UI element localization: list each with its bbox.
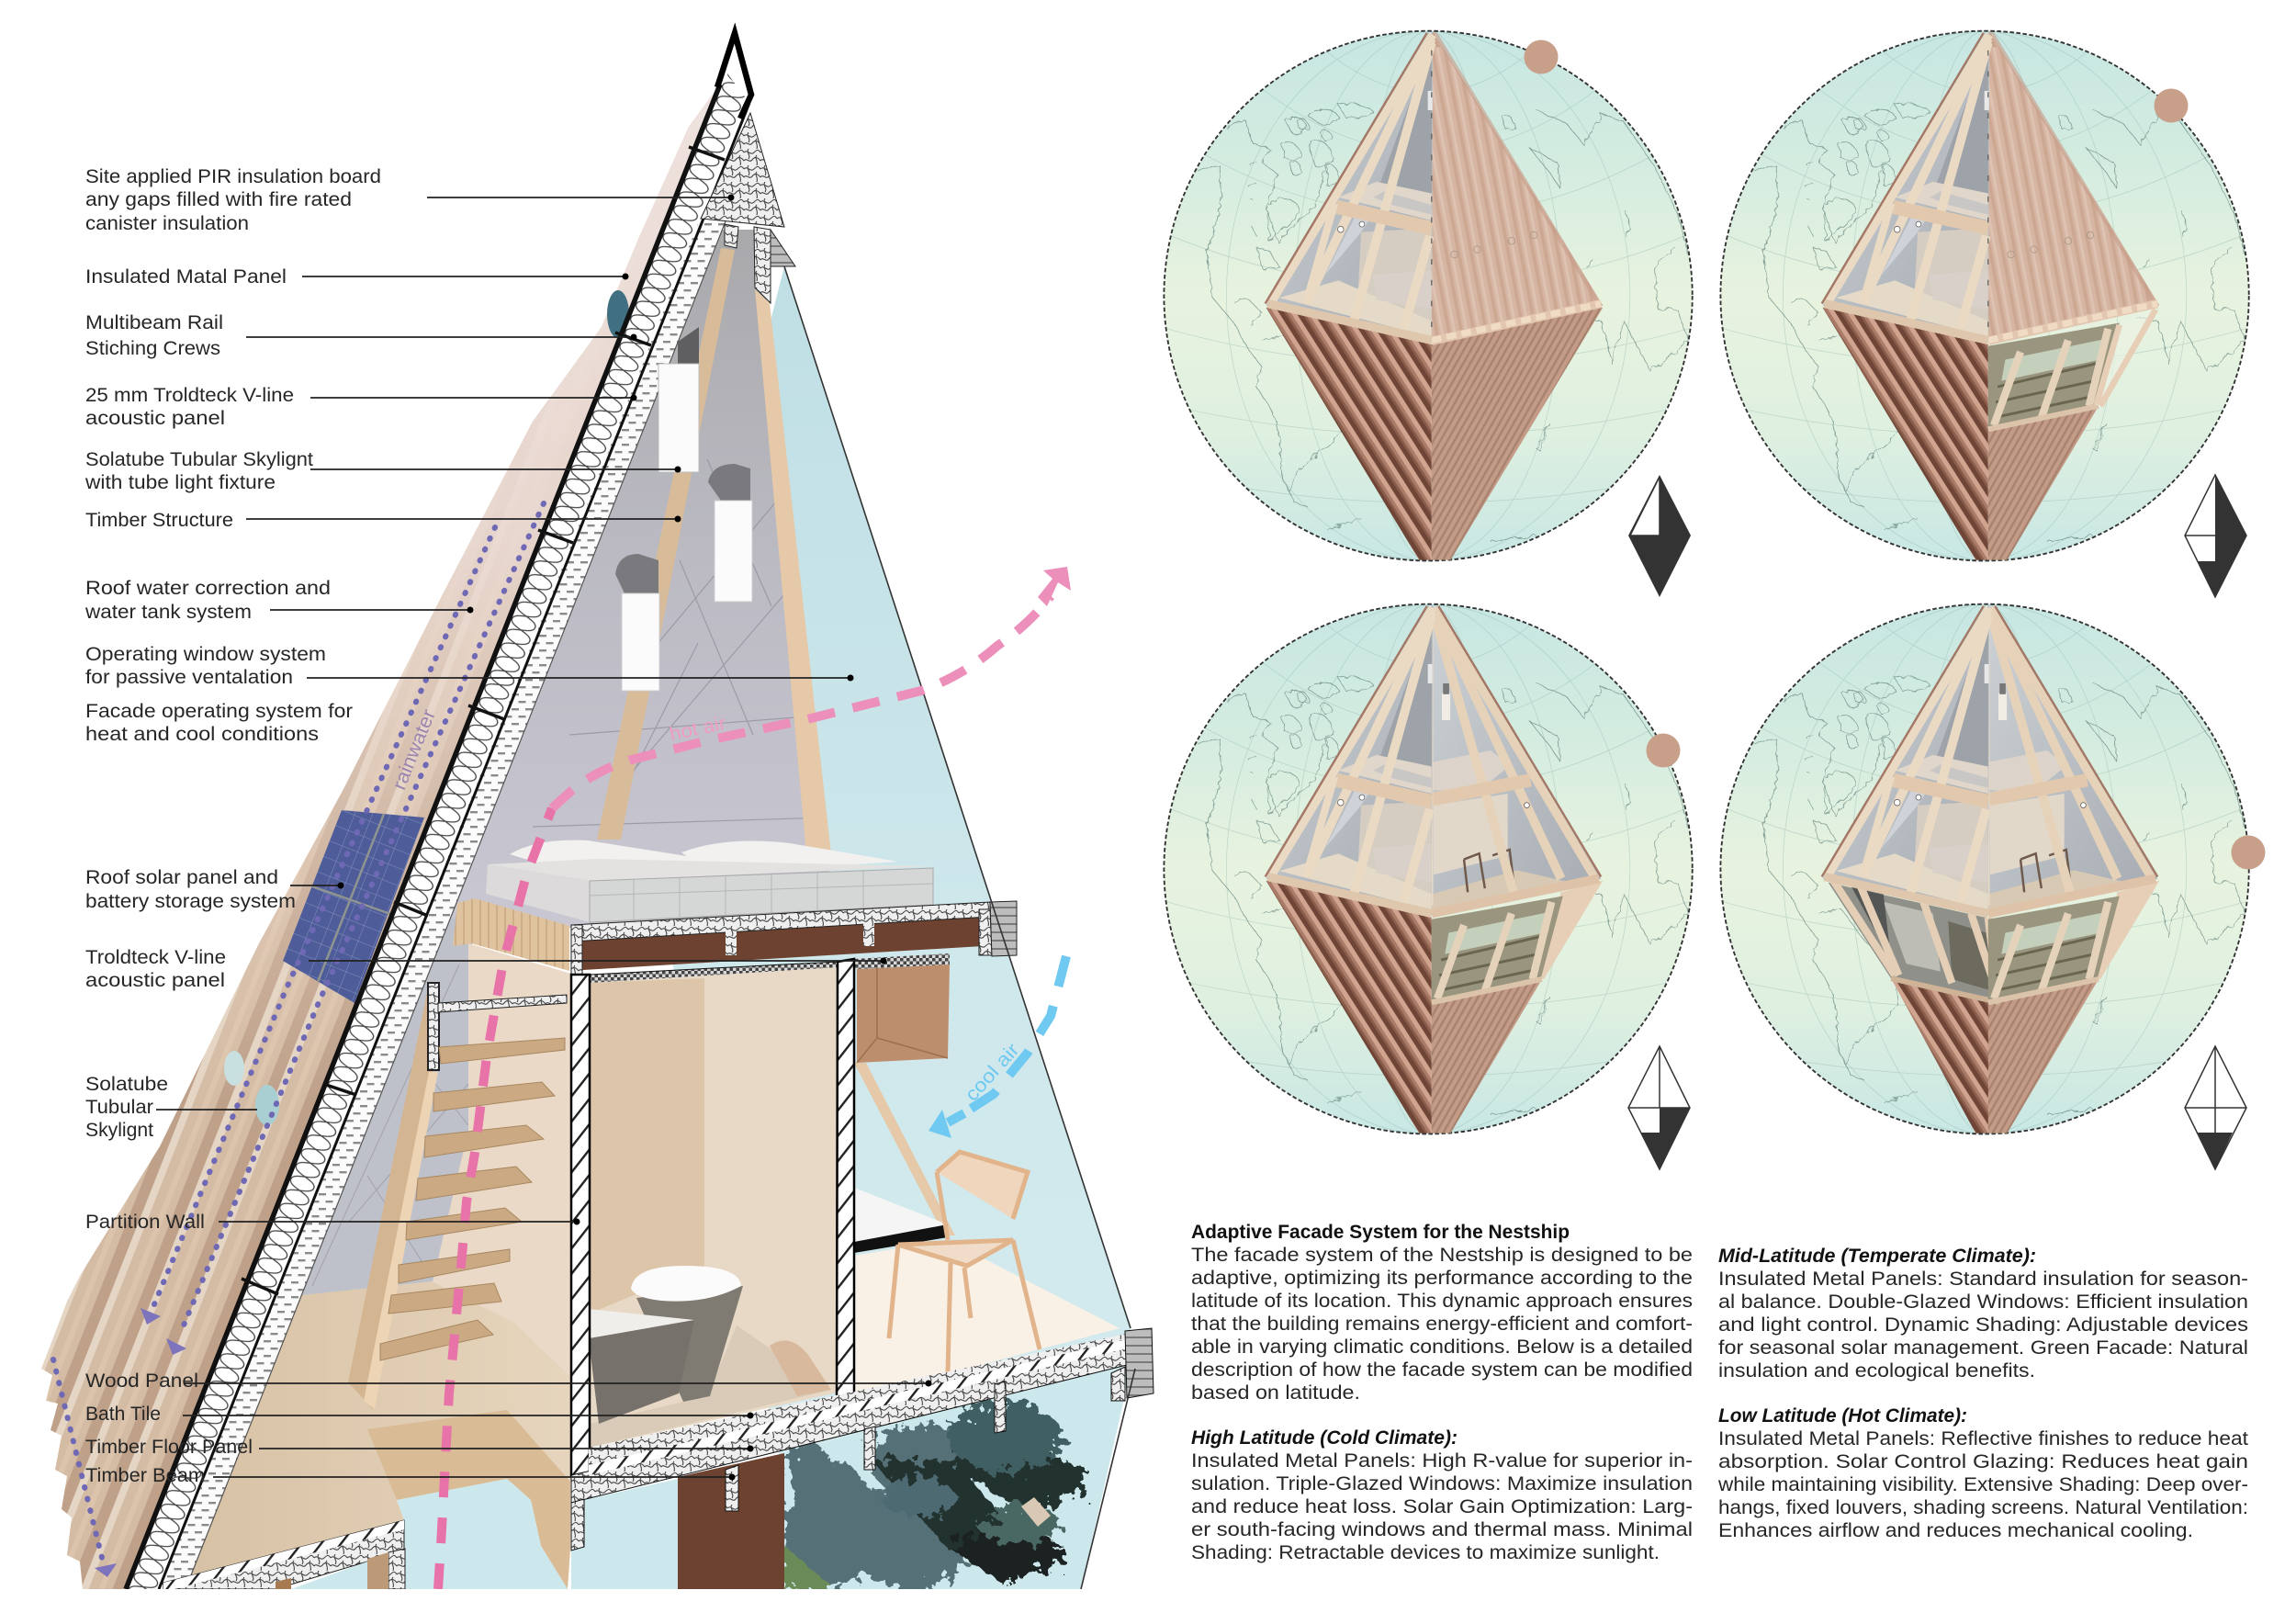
label: solar panel: battery storage system [85, 891, 296, 912]
rainwater dotted flow with arrows [53, 503, 544, 1577]
planting [781, 1350, 1135, 1589]
timber post right [755, 289, 831, 854]
toilet [589, 1266, 743, 1424]
text block: high latitude [1191, 1427, 1693, 1563]
label: roof water: water tank system [84, 602, 252, 623]
intro paragraph: The facade system of the Nestship is designed to be [1191, 1245, 1693, 1266]
rainwater label: rainwater [388, 706, 440, 793]
diagonal timber [854, 1063, 955, 1235]
section drawing: A-frame cross section [41, 33, 1154, 1589]
text block: low latitude: absorption. Solar Control Glazing: Reduces heat gain [1718, 1451, 2248, 1472]
label: PIR insulation: any gaps filled with fire rated [85, 189, 352, 210]
label: solar panel [85, 867, 343, 912]
text block: high latitude: er south-facing windows and thermal mass. Minimal [1191, 1519, 1693, 1540]
text block: low latitude [1717, 1405, 2248, 1541]
sun 2 [2155, 88, 2188, 123]
state icon 4 [2185, 1046, 2246, 1169]
text block: mid latitude: al balance. Double-Glazed Windows: Efficient insulation [1718, 1291, 2248, 1313]
pillows [510, 840, 898, 864]
right room floor [854, 1240, 1120, 1398]
text block: mid latitude: for seasonal solar management. Green Facade: Natural [1718, 1337, 2248, 1359]
label: 25 mm acoustic panel: 25 mm Troldteck V-line [85, 385, 294, 406]
text block: mid latitude: Insulated Metal Panels: Standard insulation for season- [1718, 1269, 2248, 1290]
callouts: component labels [84, 166, 932, 1486]
sun 4 [2232, 836, 2265, 869]
intro paragraph [1191, 1245, 1693, 1404]
label: Troldteck panel [85, 947, 887, 991]
intro heading: Adaptive Facade System for the Nestship [1191, 1222, 1570, 1243]
label: operating window: Operating window system [85, 644, 326, 665]
bathroom interior [589, 967, 838, 1448]
ridge cap [717, 33, 751, 118]
label: solatube with light: with tube light fixture [84, 472, 276, 493]
label: Solatube skylight: Solatube [85, 1074, 168, 1095]
pale sunlit top of roof skin [248, 94, 715, 1025]
label: roof water: Roof water correction and [85, 578, 331, 599]
text block: high latitude: and reduce heat loss. Solar Gain Optimization: Larg- [1191, 1496, 1693, 1517]
label: bath tile [85, 1404, 753, 1425]
label: Solatube skylight: Tubular [85, 1097, 153, 1118]
label: PIR insulation: Site applied PIR insulation board [85, 166, 381, 187]
text block: high latitude: High Latitude (Cold Climate): [1191, 1427, 1458, 1449]
globe 3: temperate, upper facade open [1164, 604, 1693, 1133]
lower floor [191, 1281, 571, 1574]
mattress [486, 859, 933, 922]
upper slab [571, 901, 1017, 986]
label: multibeam rail: Multibeam Rail [85, 312, 223, 333]
label: insulated metal panel [85, 266, 628, 288]
upper room grey acoustic wall [441, 230, 836, 928]
label: Troldteck panel: acoustic panel [85, 970, 225, 991]
chair [889, 1152, 1040, 1372]
label: timber structure [85, 510, 681, 531]
wooden box under stairs [367, 1410, 570, 1589]
label: timber beam: Timber Beam [85, 1465, 205, 1486]
intro paragraph: that the building remains energy-efficient and comfort- [1191, 1314, 1693, 1335]
sun 3 [1646, 733, 1681, 768]
text block: high latitude: Insulated Metal Panels: High R-value for superior in- [1191, 1450, 1693, 1472]
label: roof water [84, 578, 474, 623]
label: timber floor panel [85, 1437, 753, 1458]
intro paragraph: based on latitude. [1191, 1382, 1360, 1404]
lower grey wall behind stairs [302, 919, 472, 1295]
label: facade operating system: heat and cool conditions [85, 724, 319, 745]
state icon 3 [1628, 1046, 1690, 1169]
label: Solatube skylight [85, 1074, 257, 1141]
floor slab [571, 1328, 1154, 1551]
text block: high latitude: Shading: Retractable devices to maximize sunlight. [1191, 1542, 1660, 1563]
cool air arrow [929, 956, 1066, 1138]
text block: adaptive facade introduction [1191, 1222, 1693, 1404]
label: Troldteck panel: Troldteck V-line [85, 947, 226, 968]
sky below bath [571, 1479, 678, 1589]
label: PIR insulation: canister insulation [85, 213, 249, 234]
brown column [678, 1453, 784, 1589]
label: wood panel: Wood Panel [85, 1370, 198, 1392]
text block: mid latitude [1718, 1246, 2248, 1382]
globe 4: low latitude, full opening [1720, 604, 2249, 1133]
label: 25 mm acoustic panel: acoustic panel [85, 408, 225, 429]
roof structural lines and stitching ticks [126, 85, 749, 1589]
state icon 1 [1628, 475, 1691, 597]
label: facade operating system [85, 701, 353, 745]
text block: low latitude: Low Latitude (Hot Climate): [1718, 1405, 1967, 1427]
label: solatube with light: Solatube Tubular Skylignt [85, 449, 313, 470]
text block: low latitude: Insulated Metal Panels: Reflective finishes to reduce heat [1718, 1428, 2248, 1449]
sky under floor [397, 1479, 568, 1589]
label: partition wall [85, 1212, 580, 1233]
label: operating window [85, 644, 854, 688]
label: solatube with light [84, 449, 681, 493]
text block: mid latitude: insulation and ecological benefits. [1718, 1360, 2035, 1382]
label: operating window: for passive ventalation [85, 667, 293, 688]
lower left slab [163, 1520, 405, 1589]
label: insulated metal panel: Insulated Matal Panel [85, 266, 287, 288]
hot air arrow [438, 567, 1071, 1589]
sun 1 [1525, 40, 1558, 73]
roof solar panel [283, 810, 424, 1003]
stairs [348, 983, 567, 1409]
intro paragraph: able in varying climatic conditions. Below is a detailed [1191, 1336, 1693, 1358]
table [854, 1188, 948, 1253]
intro paragraph: description of how the facade system can be modified [1191, 1359, 1693, 1381]
label: PIR insulation [85, 166, 735, 234]
cream wall behind stairs [432, 943, 571, 1378]
label: bath tile: Bath Tile [85, 1404, 161, 1425]
tubular skylight domes [224, 290, 629, 1125]
label: Solatube skylight: Skylignt [85, 1120, 153, 1141]
label: partition wall: Partition Wall [85, 1212, 205, 1233]
label: multibeam rail: Stiching Crews [85, 338, 220, 359]
label: wood panel [85, 1370, 931, 1392]
partition walls [571, 959, 854, 1476]
label: multibeam rail [85, 312, 637, 359]
ridge hanging beams [725, 224, 795, 303]
cool air label: cool air [961, 1040, 1023, 1105]
upper stair platform [453, 898, 569, 971]
insulation band [126, 73, 749, 1589]
text block: low latitude: hangs, fixed louvers, shading screens. Natural Ventilation: [1718, 1497, 2248, 1518]
text block: high latitude: sulation. Triple-Glazed Windows: Maximize insulation [1191, 1473, 1693, 1494]
pendant tube lights [615, 327, 752, 691]
globe 1: high latitude, closed facade [1164, 31, 1693, 560]
label: 25 mm acoustic panel [85, 385, 637, 429]
label: timber structure: Timber Structure [85, 510, 233, 531]
kitchen cabinet [857, 964, 950, 1063]
text block: low latitude: while maintaining visibility. Extensive Shading: Deep over- [1717, 1474, 2248, 1495]
text block: mid latitude: and light control. Dynamic Shading: Adjustable devices [1718, 1314, 2248, 1336]
intro paragraph: latitude of its location. This dynamic approach ensures [1191, 1291, 1693, 1312]
text block: low latitude: Enhances airflow and reduces mechanical cooling. [1718, 1520, 2193, 1541]
label: timber beam [85, 1465, 735, 1486]
intro paragraph: adaptive, optimizing its performance according to the [1191, 1268, 1693, 1289]
label: solar panel: Roof solar panel and [85, 867, 278, 888]
ridge solid insulation [701, 113, 784, 227]
timber post centre [597, 248, 735, 840]
state icon 2 [2185, 475, 2246, 597]
label: facade operating system: Facade operating system for [85, 701, 353, 722]
acoustic panel dotted band [159, 221, 726, 1589]
outer corrugated roof skin [41, 85, 720, 1589]
label: timber floor panel: Timber Floor Panel [85, 1437, 253, 1458]
glazed facade wedge [672, 268, 1131, 1455]
facade outline [784, 266, 1135, 1589]
globe 2: mid latitude, one window open [1720, 31, 2249, 560]
text block: mid latitude: Mid-Latitude (Temperate Climate): [1718, 1246, 2036, 1267]
hot air label: hot air [668, 713, 727, 745]
